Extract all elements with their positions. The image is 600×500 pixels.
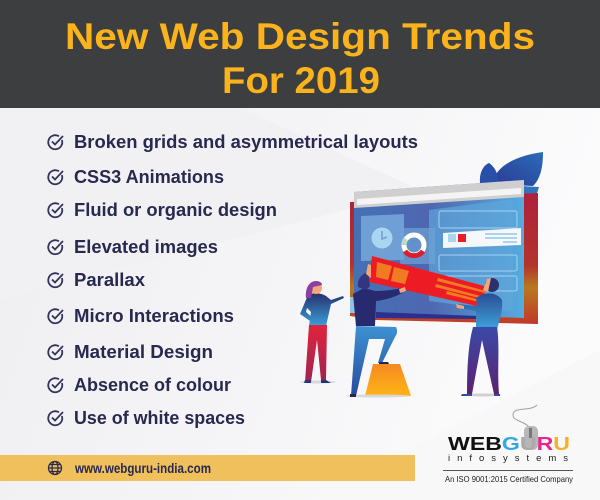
logo tagline: infosystems bbox=[448, 453, 568, 464]
item: parallax: Parallax bbox=[74, 269, 146, 290]
logo: webguru infosystems bbox=[443, 405, 574, 484]
website bar bbox=[0, 455, 415, 481]
item: white spaces: Use of white spaces bbox=[74, 407, 245, 428]
red banner being carried bbox=[369, 256, 488, 306]
white highlighted card bbox=[443, 228, 521, 248]
person: man with cap bbox=[456, 278, 502, 396]
logo wordmark: WEB GURU bbox=[448, 434, 570, 454]
certification note: An ISO 9001:2015 Certified Company bbox=[445, 474, 574, 484]
item: broken grids: Broken grids and asymmetrical layouts bbox=[74, 131, 418, 152]
checklist of trends bbox=[48, 131, 418, 428]
title: For 2019 bbox=[222, 60, 380, 101]
back panel bbox=[350, 193, 538, 324]
screen left card with clock bbox=[361, 214, 404, 261]
item: material design: Material Design bbox=[74, 341, 213, 362]
title bbox=[65, 16, 535, 101]
item: fluid or organic: Fluid or organic design bbox=[74, 199, 277, 220]
item: elevated images: Elevated images bbox=[74, 236, 218, 257]
person: man with foot on block bbox=[346, 264, 411, 398]
title: New Web Design Trends bbox=[65, 16, 535, 57]
icon: mouse bbox=[513, 405, 538, 450]
icon: leaves bbox=[480, 152, 543, 210]
browser window bbox=[350, 180, 524, 319]
illustration: web design team bbox=[300, 152, 543, 398]
screen list rows bbox=[439, 211, 517, 291]
item: absence of colour: Absence of colour bbox=[74, 374, 231, 395]
item: css3 animations: CSS3 Animations bbox=[74, 166, 224, 187]
icon: globe bbox=[48, 462, 62, 474]
donut chart bbox=[400, 228, 435, 264]
header band bbox=[0, 0, 600, 108]
website url: www.webguru-india.com bbox=[74, 461, 211, 476]
item: micro interactions: Micro Interactions bbox=[74, 305, 234, 326]
person: woman pointing bbox=[300, 281, 344, 384]
